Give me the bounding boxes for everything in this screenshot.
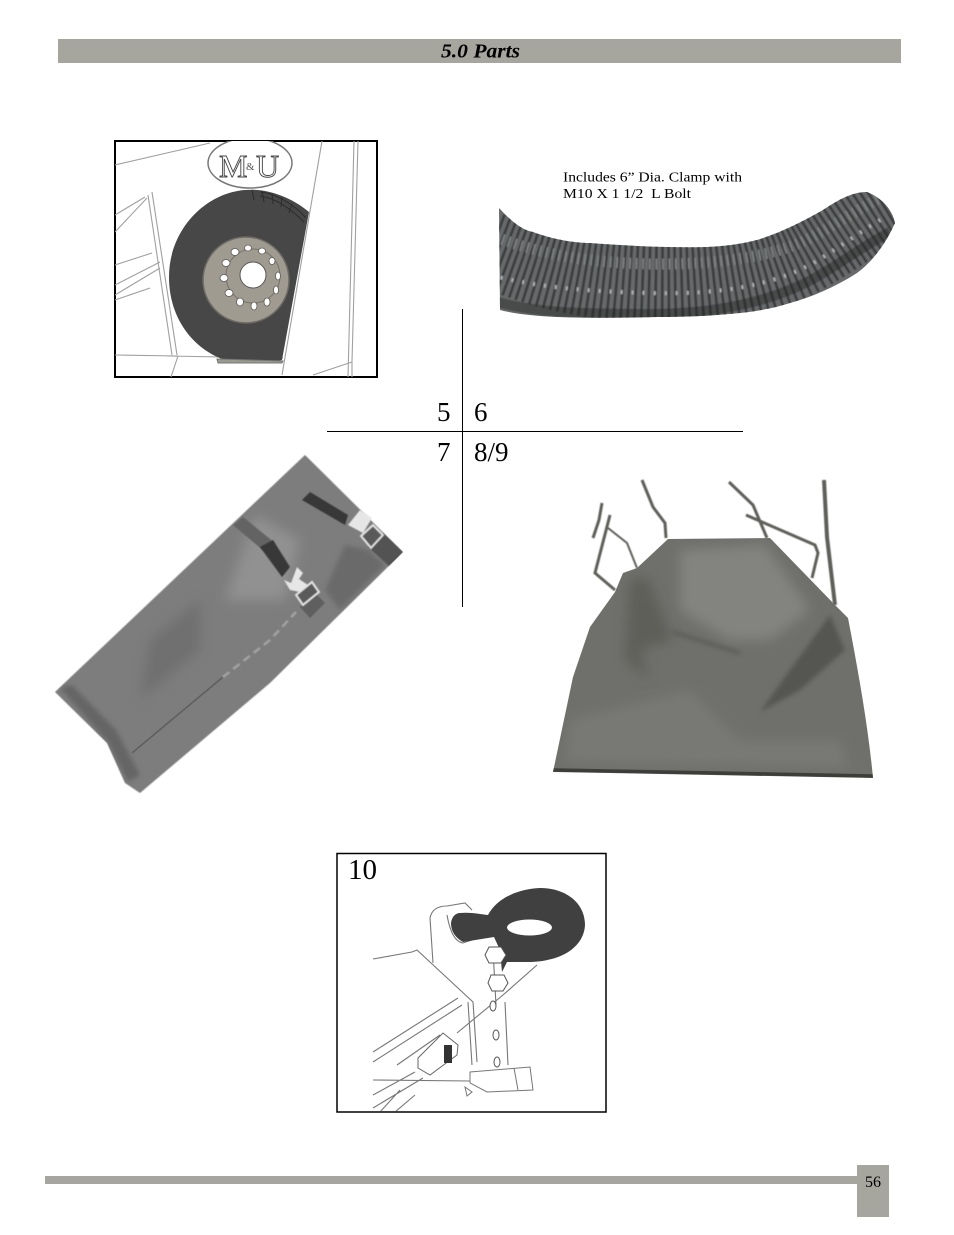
panel: tow hitch illustration [337, 854, 606, 1112]
callout numbers [437, 397, 509, 467]
hitch box [470, 1067, 533, 1092]
strap [260, 540, 290, 577]
callout numbers: 6 [474, 397, 488, 427]
logo: M&U: & [246, 161, 255, 173]
logo: M&U: M [219, 148, 247, 184]
logo: M&U: U [256, 148, 279, 184]
heading: 5.0 Parts: 5.0 Parts [441, 40, 520, 62]
frame lines [115, 141, 358, 377]
photo: corrugated hose [490, 185, 900, 320]
callout numbers: 8/9 [474, 437, 509, 467]
label: 10: 10 [348, 854, 377, 886]
bracket and frame lines [373, 903, 537, 1112]
straps [593, 480, 835, 605]
logo: M&U [208, 138, 292, 188]
wheel chock [217, 359, 283, 363]
bolts [485, 947, 508, 1067]
callout numbers: 5 [437, 397, 450, 427]
caption: clamp note [563, 170, 742, 202]
buckle 2 [348, 510, 383, 548]
footer rule [45, 1176, 857, 1184]
photo: tarp bag with buckles [55, 455, 403, 793]
page number tab [857, 1165, 889, 1217]
callout numbers: 7 [437, 437, 450, 467]
divider cross [327, 309, 743, 607]
photo: apron with straps [553, 480, 873, 778]
page number tab: 56 [865, 1174, 881, 1191]
winch latch [418, 1033, 458, 1075]
caption: clamp note: Includes 6” Dia. Clamp with [563, 170, 742, 186]
header bar [58, 39, 901, 63]
tow ring [451, 888, 585, 972]
panel: spare tire illustration [115, 138, 377, 377]
buckle 1 [284, 567, 319, 605]
tire [169, 190, 309, 363]
caption: clamp note: M10 X 1 1/2 L Bolt [563, 187, 691, 202]
wheel rim [203, 237, 289, 323]
